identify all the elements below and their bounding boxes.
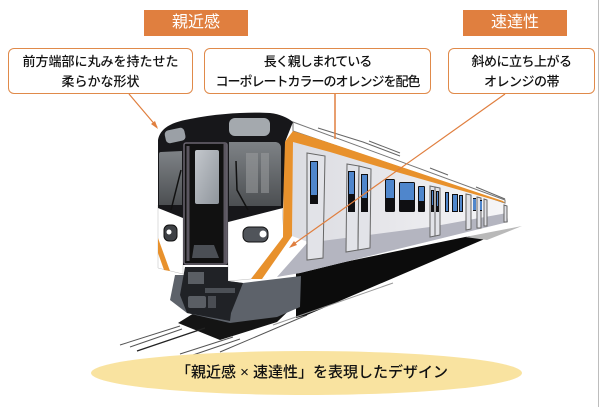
lower side grey band <box>277 213 508 277</box>
callout: front shape <box>8 48 193 94</box>
heading: 速達性 <box>463 10 567 36</box>
skirt <box>170 275 301 323</box>
car side <box>262 131 508 279</box>
heading: 速達性: 速達性 <box>491 14 539 31</box>
callout: corporate orange: コーポレートカラーのオレンジを配色 <box>215 74 420 89</box>
callout: orange band: 斜めに立ち上がる <box>471 54 572 69</box>
right edge line <box>598 0 600 407</box>
under-car light strip <box>465 226 522 240</box>
coupler <box>180 267 243 321</box>
callout lines <box>129 94 505 248</box>
callout: orange band <box>448 48 595 94</box>
orange roof band <box>293 131 505 203</box>
callout: orange band: オレンジの帯 <box>484 74 559 89</box>
summary ellipse: 「親近感 × 速達性」を表現したデザイン <box>176 364 448 381</box>
front door <box>184 143 227 264</box>
front windows <box>159 118 281 210</box>
left front orange stripe <box>158 238 170 271</box>
side windows <box>310 161 482 212</box>
ground shadow and rails <box>120 300 307 356</box>
side doors <box>307 153 507 260</box>
orange corner band <box>251 131 293 279</box>
underfloor <box>296 236 487 318</box>
front black mask <box>158 113 293 265</box>
callout: corporate orange <box>204 48 431 94</box>
headlights <box>164 225 268 242</box>
roof and equipment <box>293 122 505 203</box>
callout: front shape: 柔らかな形状 <box>61 74 140 89</box>
heading: 親近感: 親近感 <box>172 14 220 31</box>
summary ellipse <box>91 351 522 395</box>
heading: 親近感 <box>144 10 248 36</box>
callout: front shape: 前方端部に丸みを持たせた <box>22 54 178 69</box>
front white panels <box>158 205 284 281</box>
callout: corporate orange: 長く親しまれている <box>264 54 371 69</box>
